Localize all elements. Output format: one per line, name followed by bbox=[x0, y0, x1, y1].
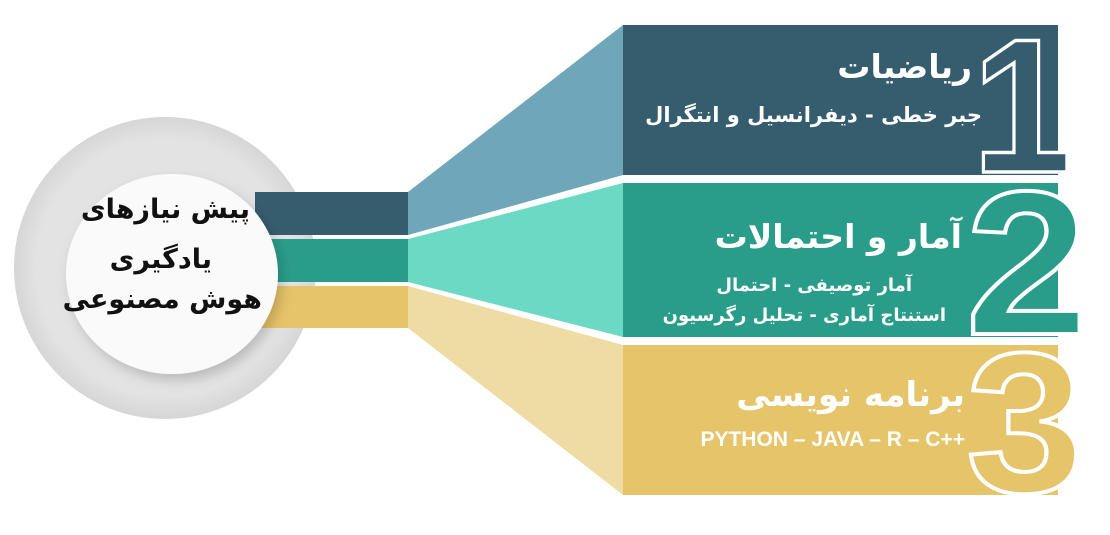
panel 2 heading: آمار و احتمالات bbox=[715, 217, 962, 256]
funnel trapezoids bbox=[408, 25, 623, 495]
number 1: 1 bbox=[972, 0, 1072, 213]
panel 1 subtext: جبر خطی - دیفرانسیل و انتگرال bbox=[645, 103, 982, 127]
title line 3: هوش مصنوعی bbox=[63, 284, 262, 315]
number 2: 2 bbox=[965, 150, 1089, 378]
title: prerequisites: پیش نیازهای bbox=[81, 194, 250, 225]
panel 2 subtext line 1: آمار توصیفی - احتمال bbox=[716, 275, 912, 296]
panel 2 subtext line 2: استنتاج آماری - تحلیل رگرسیون bbox=[663, 305, 946, 326]
panel 3 background bbox=[623, 345, 1058, 495]
inner white circle bbox=[66, 174, 278, 374]
outer gray circle bbox=[14, 117, 316, 419]
panel 1 background bbox=[623, 25, 1058, 175]
title line 2: یادگیری bbox=[110, 244, 212, 275]
number 3: 3 bbox=[966, 311, 1084, 535]
connector bars bbox=[255, 192, 408, 328]
panel 3 heading: برنامه نویسی bbox=[736, 375, 965, 415]
programming languages: PYTHON – JAVA – R – C++ bbox=[700, 428, 965, 451]
panel 2 background bbox=[623, 183, 1058, 337]
panel 1 heading: ریاضیات bbox=[837, 47, 972, 86]
